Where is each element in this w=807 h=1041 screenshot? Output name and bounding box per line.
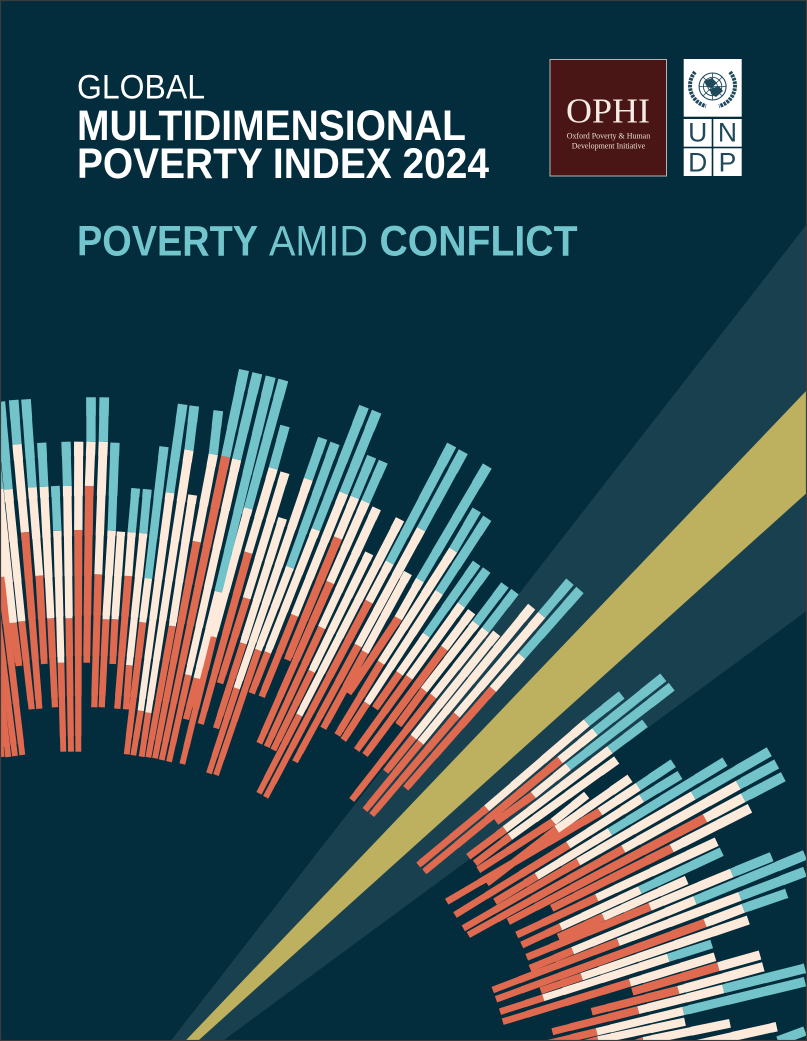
UNDP logo — [684, 59, 742, 178]
OPHI logo — [550, 60, 666, 176]
UNDP letters: U — [688, 118, 707, 148]
UNDP letters: P — [719, 148, 736, 178]
icon: UN emblem — [690, 72, 735, 106]
title — [77, 68, 489, 188]
OPHI logo: Oxford Poverty & Human — [567, 132, 650, 140]
light wedge beam — [171, 224, 807, 1041]
heading line: MULTIDIMENSIONAL: MULTIDIMENSIONAL — [77, 102, 466, 150]
subtitle: CONFLICT — [380, 218, 578, 266]
UNDP letters: N — [718, 118, 737, 148]
lower radial bar chart fan — [418, 677, 805, 1041]
subtitle — [77, 218, 578, 266]
upper radial bar chart fan — [0, 370, 580, 815]
subtitle: POVERTY — [77, 218, 258, 266]
subtitle: AMID — [269, 218, 368, 266]
UNDP letters — [688, 118, 737, 178]
heading line: GLOBAL: GLOBAL — [77, 68, 205, 106]
OPHI logo: Development Initiative — [572, 142, 646, 150]
OPHI logo: OPHI — [566, 92, 650, 130]
gold wedge beam — [185, 390, 807, 1041]
UNDP letters: D — [688, 148, 707, 178]
heading line: POVERTY INDEX 2024: POVERTY INDEX 2024 — [77, 140, 489, 188]
